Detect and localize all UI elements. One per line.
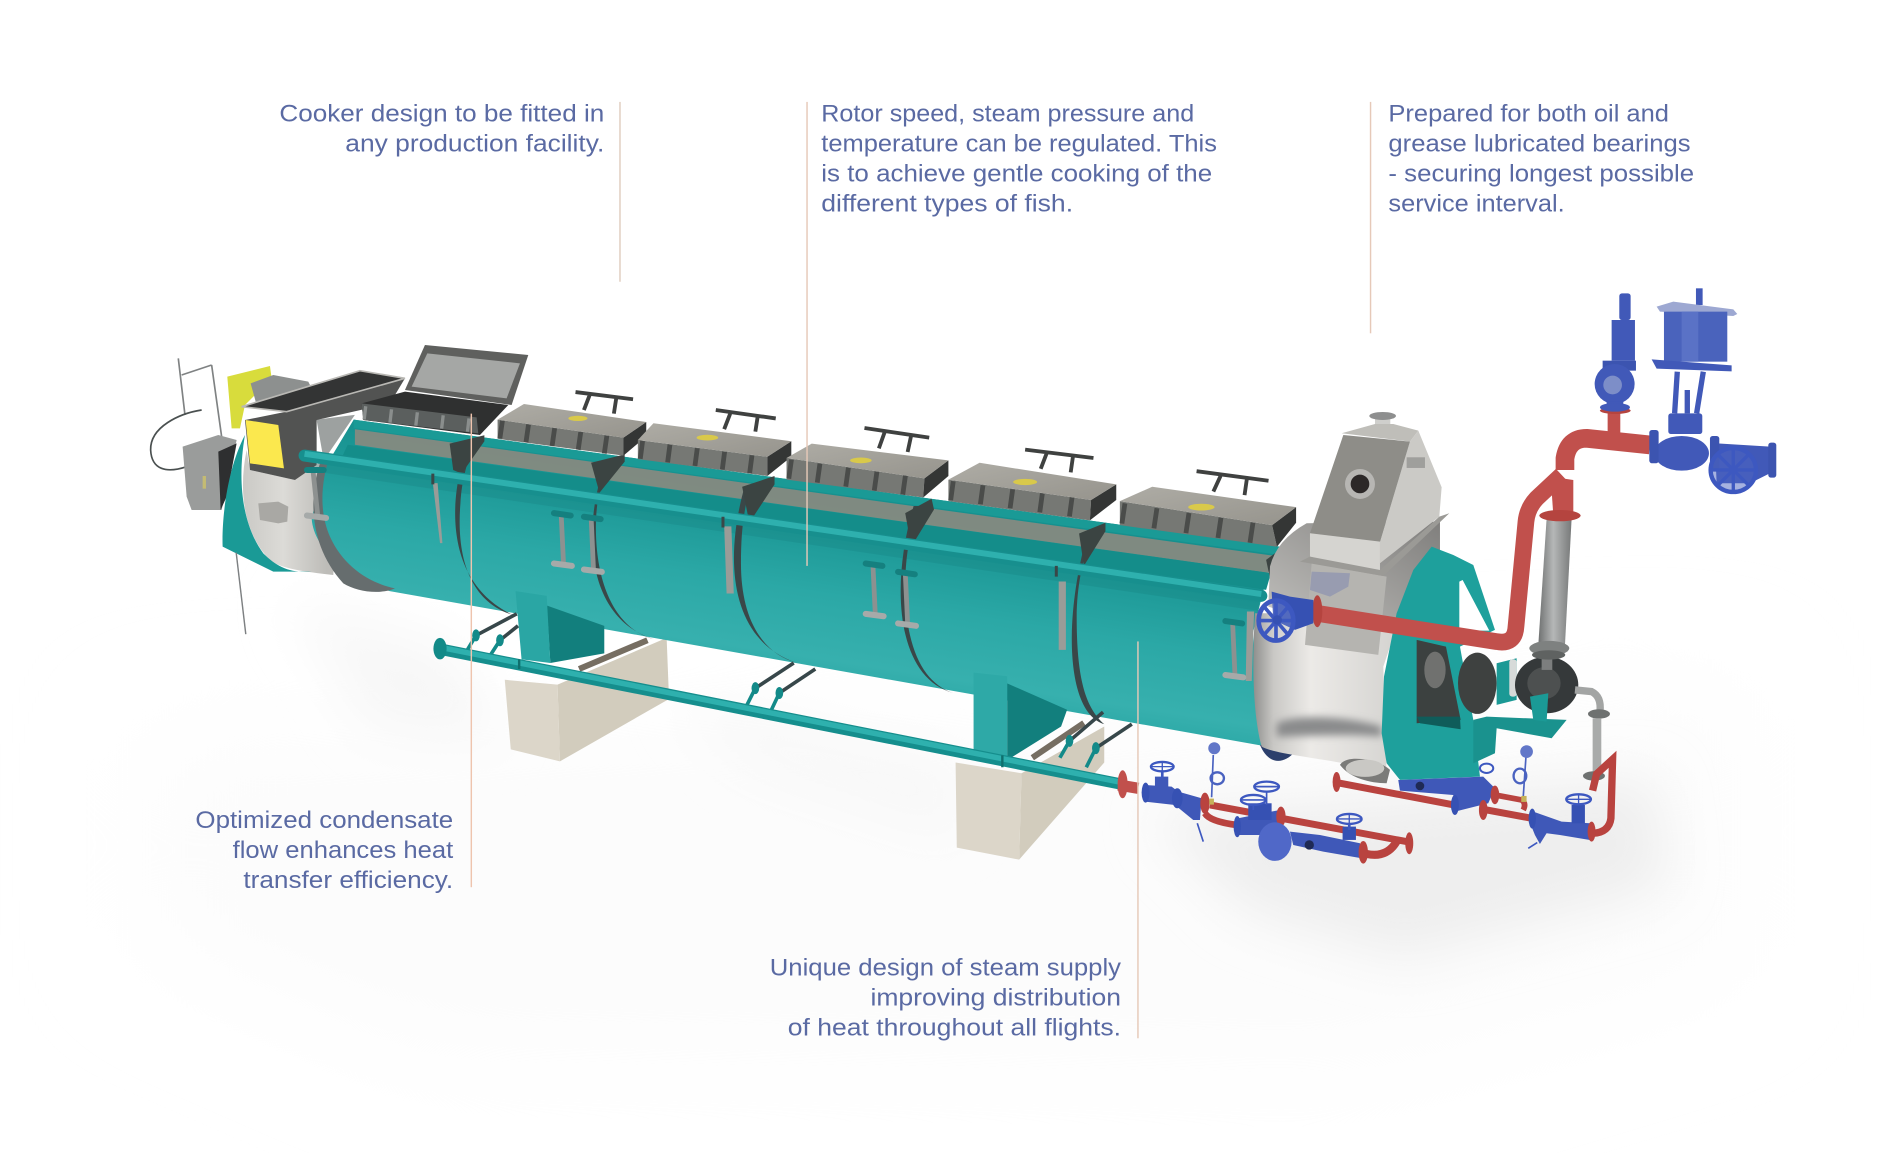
left valve manifold xyxy=(1118,742,1413,864)
concrete foundation blocks xyxy=(505,638,1104,860)
lower teal pipe xyxy=(433,638,1121,784)
drum section seams xyxy=(313,440,1104,724)
left drive end assembly xyxy=(151,358,310,510)
text: steam supply: of heat throughout all flights. xyxy=(788,1014,1121,1041)
closed hood 2 xyxy=(638,410,791,476)
closed hood 1 xyxy=(498,392,646,456)
text: condensate: transfer efficiency. xyxy=(243,867,453,894)
text: condensate: Optimized condensate xyxy=(195,807,453,834)
text: rotor speed: temperature can be regulated. This xyxy=(821,131,1217,158)
right valve manifold xyxy=(1333,745,1613,848)
sight glasses xyxy=(307,470,1243,677)
main drum xyxy=(309,415,1281,746)
gearbox and coupling xyxy=(1458,653,1610,781)
text: rotor speed: Rotor speed, steam pressure and xyxy=(821,101,1194,128)
right steel drum end xyxy=(1253,522,1440,783)
text: cooker design: any production facility. xyxy=(345,131,604,158)
leader line: bearings xyxy=(1370,102,1371,333)
open hood with lid xyxy=(362,345,528,435)
closed hood 3 xyxy=(787,428,948,498)
red steam pipe xyxy=(1312,407,1650,642)
control valve with actuator xyxy=(1649,288,1776,492)
left steel drum end with teal flange xyxy=(223,435,337,575)
text: cooker design: Cooker design to be fitted in xyxy=(279,101,604,128)
hanger straps xyxy=(433,483,1254,681)
text: condensate xyxy=(195,807,454,894)
text: steam supply xyxy=(770,954,1121,1041)
text: rotor speed: is to achieve gentle cooking of the xyxy=(821,161,1212,188)
safety valve and control valve xyxy=(1595,288,1776,492)
teal end frame xyxy=(1382,547,1567,780)
vapour outlet box xyxy=(1300,412,1449,655)
upper teal rail pipe xyxy=(305,454,1261,596)
text: steam supply: Unique design of steam supply xyxy=(770,954,1121,981)
leader line: steam supply xyxy=(1137,641,1139,1038)
safety valve xyxy=(1595,293,1636,412)
text: bearings: service interval. xyxy=(1388,191,1565,218)
text: condensate: flow enhances heat xyxy=(233,837,454,864)
text: bearings: Prepared for both oil and xyxy=(1388,101,1669,128)
condensate drain stubs xyxy=(465,614,1132,767)
cooker machine xyxy=(151,288,1776,864)
hopper xyxy=(242,371,405,480)
floor shadow xyxy=(144,599,1739,1067)
text: steam supply: improving distribution xyxy=(870,984,1121,1011)
top brackets xyxy=(317,415,1281,583)
teal support legs xyxy=(516,591,1084,760)
text: bearings: grease lubricated bearings xyxy=(1388,131,1691,158)
leader line: cooker design xyxy=(619,102,621,282)
closed hood 4 xyxy=(948,450,1116,520)
closed hood 5 xyxy=(1120,471,1296,547)
text: rotor speed: different types of fish. xyxy=(821,191,1073,218)
text: cooker design xyxy=(279,101,604,158)
lower valve manifolds xyxy=(1118,742,1613,864)
text: bearings xyxy=(1388,101,1694,218)
text: rotor speed xyxy=(821,101,1217,218)
right end of the machine xyxy=(1253,407,1650,783)
blue valve on steam pipe xyxy=(1259,592,1313,641)
text: bearings: - securing longest possible xyxy=(1388,161,1694,188)
thin left rod xyxy=(236,553,246,634)
leader line: rotor speed xyxy=(806,102,808,566)
leader line: condensate xyxy=(471,414,472,887)
expansion bellows xyxy=(1529,518,1572,660)
